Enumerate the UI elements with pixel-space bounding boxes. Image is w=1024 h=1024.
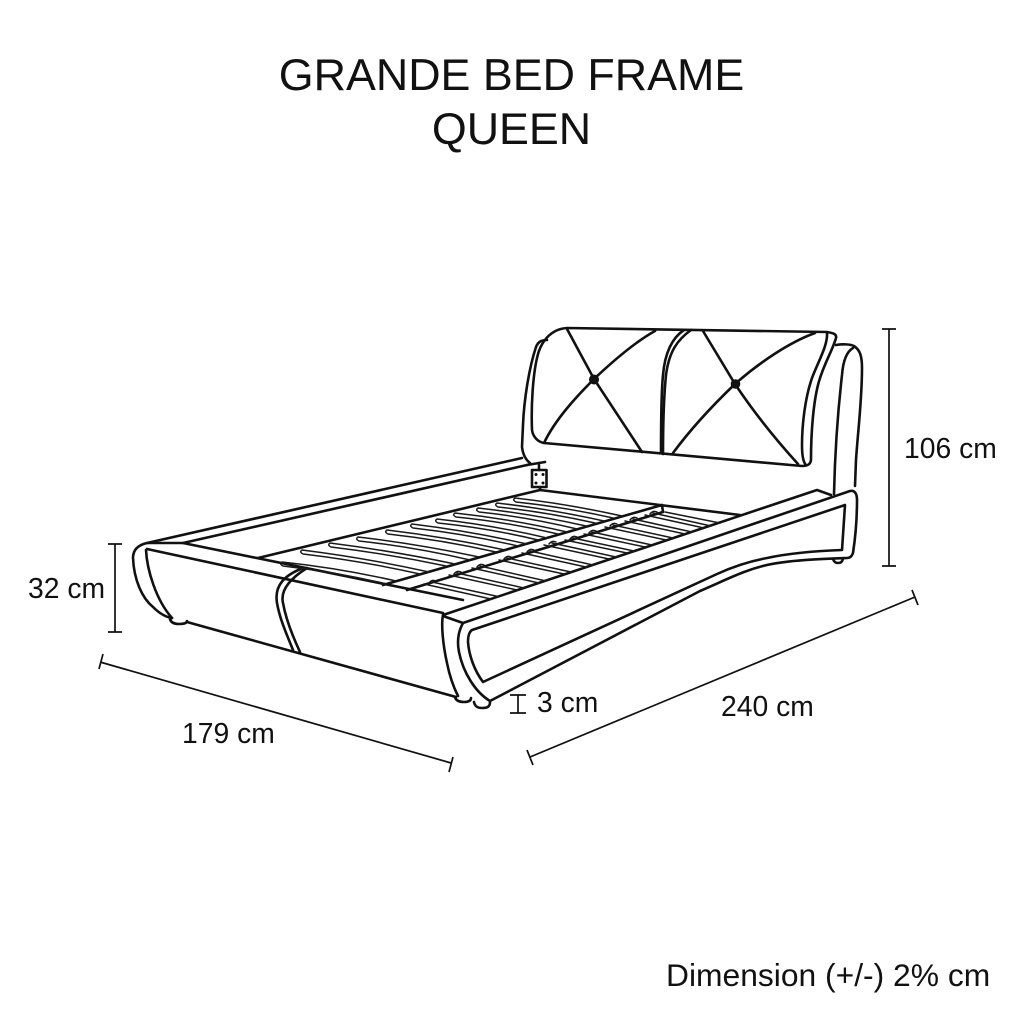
- centre strap: [277, 568, 303, 650]
- dimension: 106 cm height: [882, 329, 997, 566]
- dimension: 179 cm width: 179 cm: [182, 717, 275, 749]
- foot end band: [147, 549, 443, 613]
- foot end bottom edge: [187, 622, 456, 697]
- dimension: 240 cm length: [527, 590, 918, 765]
- bracket: [527, 462, 545, 470]
- near side rail: [443, 490, 831, 615]
- slat rivets: [429, 511, 657, 583]
- tufting seams: [567, 329, 642, 452]
- foot rail and side rail outlines: [133, 458, 857, 708]
- dimension: 106 cm height: 106 cm: [904, 432, 997, 464]
- title: QUEEN: [432, 104, 591, 154]
- title: GRANDE BED FRAME: [279, 50, 744, 100]
- slatted base: [258, 490, 740, 599]
- dimension: 179 cm width: [99, 654, 453, 772]
- pillow divider: [663, 330, 691, 454]
- feet: [170, 619, 187, 624]
- headboard: [522, 328, 862, 494]
- dimension: 3 cm feet: [510, 686, 598, 718]
- left slats: [281, 498, 622, 584]
- title: [279, 50, 744, 154]
- dimension: 32 cm height: 32 cm: [28, 572, 105, 604]
- dimension: 3 cm feet: 3 cm: [537, 686, 598, 718]
- far side rail: [133, 458, 522, 618]
- right slats: [424, 512, 720, 599]
- tolerance note: Dimension (+/-) 2% cm: [666, 957, 990, 993]
- dimension: 240 cm length: 240 cm: [721, 690, 814, 722]
- tufting buttons: [589, 374, 599, 384]
- centre rail: [383, 505, 663, 590]
- dimension: 32 cm height: [28, 544, 122, 632]
- side panel inset: [468, 505, 845, 682]
- bed frame line drawing: [133, 328, 862, 708]
